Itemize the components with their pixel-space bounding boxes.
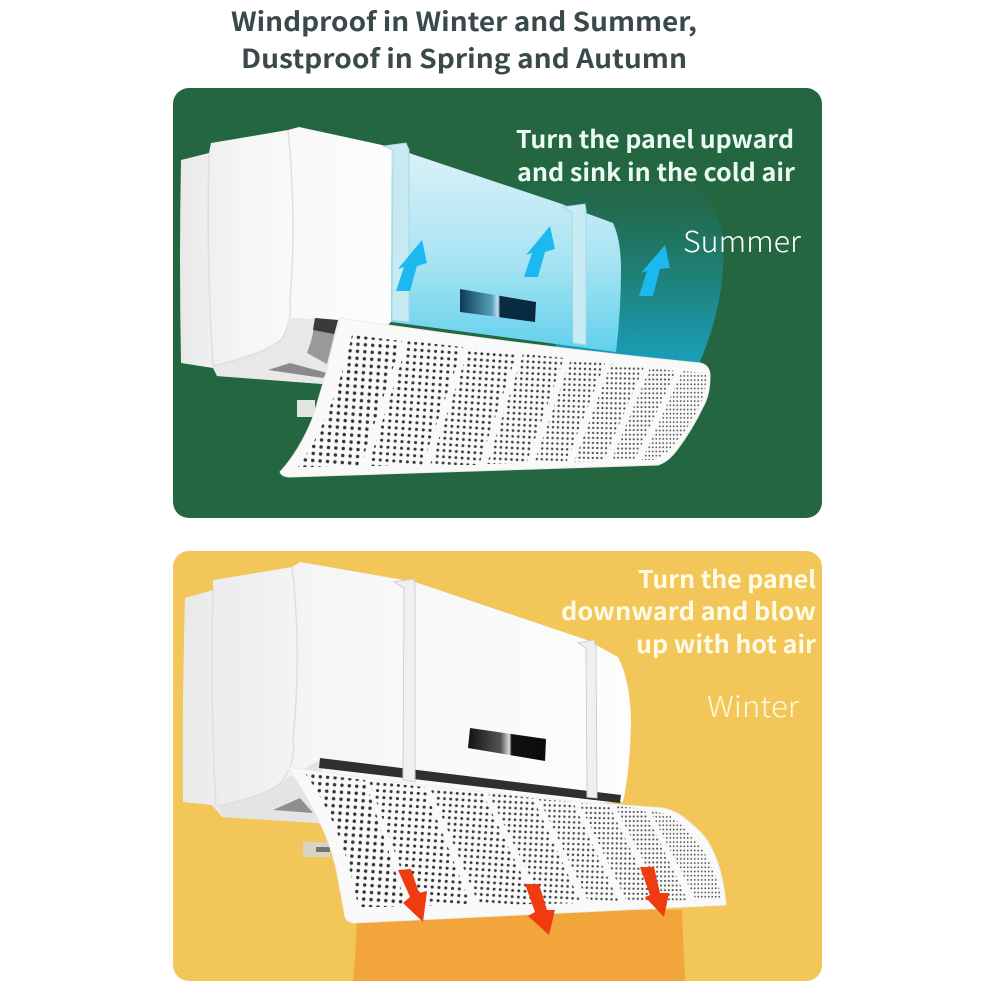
caption: summer: Turn the panel upward [516,120,794,155]
slot [319,758,621,803]
title: Windproof in Winter and Summer, [231,2,697,39]
mounting strap right [563,204,586,345]
caption: summer: and sink in the cold air [517,153,796,188]
caption: winter [561,560,817,660]
hot air [353,910,685,981]
bracket [297,400,315,417]
caption: winter: downward and blow [561,592,816,627]
label: Winter: Winter [707,684,800,726]
air conditioner unit [183,562,631,857]
mounting strap right [578,640,597,798]
panel: summer [173,88,822,518]
mounting strap left [394,579,415,782]
bracket [303,842,330,857]
arrows: red down [398,867,669,935]
panel: winter [173,551,822,981]
title: Dustproof in Spring and Autumn [241,39,687,76]
caption: winter: up with hot air [636,625,817,660]
caption: summer [516,120,796,188]
mounting strap left [384,143,409,322]
label: Summer: Summer [683,219,802,261]
arrows: blue up [396,226,670,296]
air conditioner unit [180,127,621,417]
perforated panel [287,767,726,923]
caption: winter: Turn the panel [638,560,816,595]
title [231,2,697,76]
display [460,289,536,322]
display [468,728,546,761]
cold air glow [500,165,723,366]
perforated panel [280,318,710,477]
